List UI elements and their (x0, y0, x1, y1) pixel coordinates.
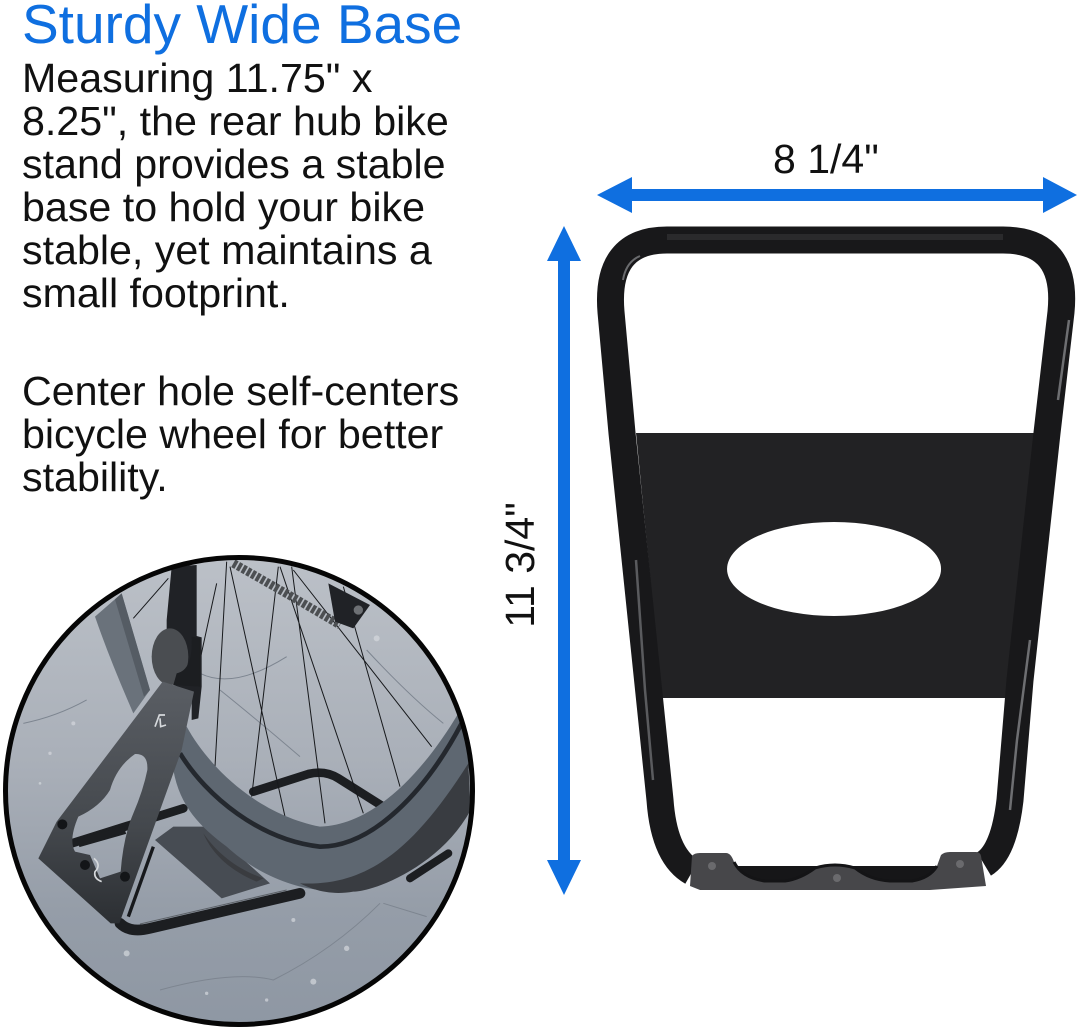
circular inset photo (0, 550, 480, 1029)
base frame front tube (120, 893, 300, 930)
back wheel arc (95, 593, 150, 713)
text block: center hole: stability. (22, 454, 168, 500)
arrow: width (597, 177, 1077, 213)
stand side plate (38, 682, 194, 923)
plate bolts (57, 819, 130, 882)
width label: 8 1/4" (773, 136, 879, 182)
arrow: height (547, 226, 581, 895)
base frame right end (410, 853, 448, 878)
text block: measurements: base to hold your bike (22, 184, 425, 230)
stand product photo (610, 237, 1069, 890)
text block: measurements: stand provides a stable (22, 141, 446, 187)
stand upright and knob (167, 565, 202, 720)
text block: measurements: 8.25", the rear hub bike (22, 98, 449, 144)
text block: center hole: bicycle wheel for better (22, 411, 443, 457)
base center plate (155, 827, 270, 898)
chain (233, 563, 340, 625)
frame tube through plate opening (78, 830, 125, 843)
base frame rear tube (72, 773, 383, 843)
height label: 11 3/4" (497, 502, 543, 628)
text block: center hole (22, 368, 459, 500)
text block: center hole: Center hole self-centers (22, 368, 459, 414)
spokes (133, 562, 432, 823)
text block: measurements: Measuring 11.75" x (22, 55, 372, 101)
tire (173, 713, 470, 891)
text block: measurements: stable, yet maintains a (22, 227, 432, 273)
plate logo (94, 715, 166, 882)
text block: measurements: small footprint. (22, 270, 290, 316)
text block: measurements (22, 55, 449, 316)
